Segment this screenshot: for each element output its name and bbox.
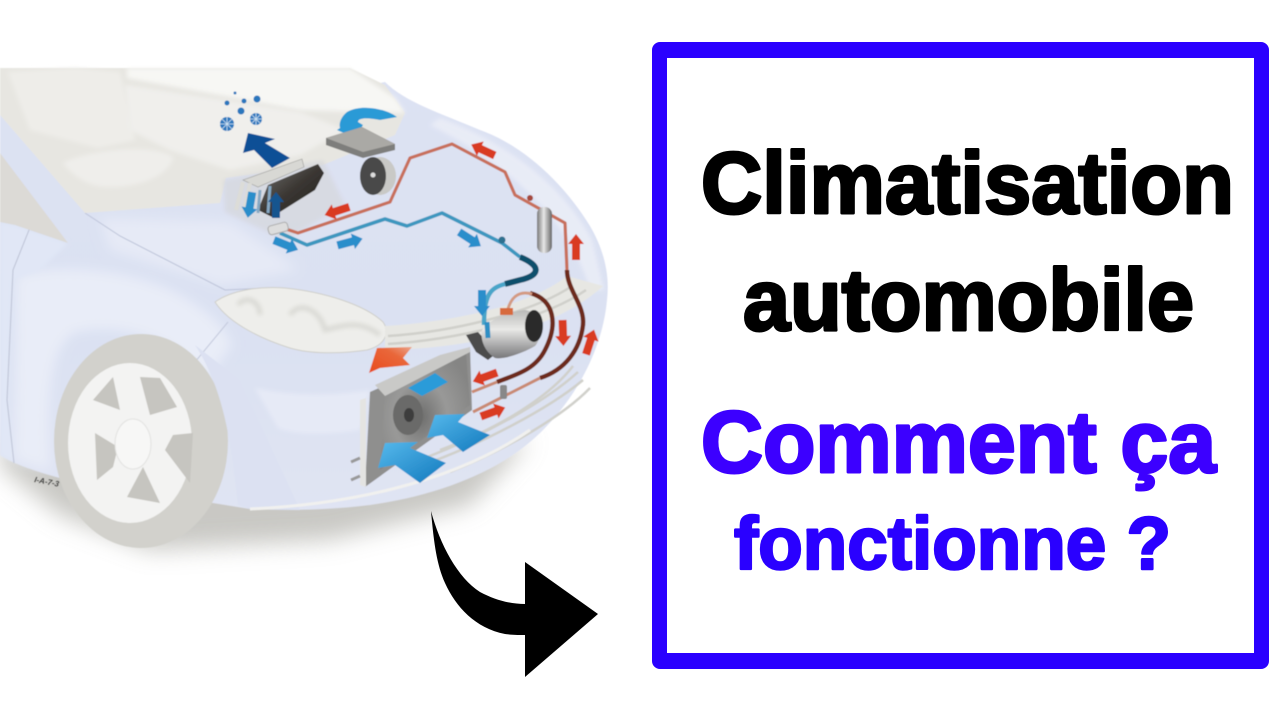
receiver drier bbox=[537, 207, 552, 253]
pipe to condenser upper bbox=[472, 382, 497, 392]
dashboard top bbox=[125, 85, 345, 170]
brown hose to condenser bbox=[540, 270, 583, 378]
arrow: air flow middle bbox=[427, 414, 490, 452]
hood highlight bbox=[430, 118, 604, 290]
arrow: intake air curved bbox=[337, 108, 397, 138]
arrow: flow blue 1 bbox=[271, 233, 301, 257]
condenser and fan bbox=[351, 347, 472, 487]
icon: snowflakes bbox=[220, 92, 262, 131]
subheading: fonctionne ?: fonctionne ? bbox=[734, 502, 1171, 585]
front fender highlight bbox=[15, 270, 232, 470]
dark blue hose bbox=[505, 257, 536, 284]
grille stripe set bbox=[388, 286, 590, 472]
A-pillar window bbox=[0, 153, 68, 243]
panel border bbox=[652, 42, 1269, 669]
headlight lens detail bbox=[238, 300, 380, 335]
service port red bbox=[527, 195, 533, 201]
blower fan bbox=[360, 157, 396, 195]
heading: automobile: automobile bbox=[743, 252, 1194, 349]
fender panel right of tyre bbox=[195, 345, 300, 510]
wheel rim bbox=[68, 363, 193, 523]
pressure switch bbox=[500, 385, 507, 399]
evaporator bbox=[236, 159, 324, 217]
arrow: hot air out orange bbox=[369, 347, 412, 373]
interior and dashboard bbox=[0, 68, 405, 213]
brown hose from compressor bbox=[497, 293, 553, 382]
evaporator housing bbox=[223, 160, 345, 240]
pipe expansion valve bbox=[267, 222, 289, 235]
service port bbox=[498, 236, 506, 244]
arrow: evaporator out bbox=[268, 192, 284, 218]
cowl highlight bbox=[100, 218, 300, 285]
bumper fog recess bbox=[255, 388, 370, 434]
arrow: air flow lower bbox=[378, 442, 446, 483]
arrow: flow blue 4 bbox=[474, 290, 490, 316]
pipe to condenser lower bbox=[473, 378, 540, 412]
blue hose to compressor bbox=[484, 284, 505, 325]
bumper lip bbox=[250, 430, 530, 509]
hood crease line bbox=[85, 213, 268, 290]
red refrigerant pipe bbox=[283, 144, 567, 270]
tyre bbox=[54, 334, 228, 548]
part number label: I-A-7-3 bbox=[34, 475, 60, 489]
arrow: flow red 1 bbox=[468, 137, 498, 163]
arrow: flow blue 2 bbox=[335, 231, 365, 253]
headlight bbox=[215, 288, 386, 353]
arrow: flow red 3 bbox=[568, 234, 584, 260]
arrow: cold air to cabin bbox=[243, 133, 290, 168]
arrow: flow red 5 bbox=[578, 327, 602, 357]
car body bbox=[0, 82, 608, 510]
seat cushion bbox=[63, 149, 173, 187]
heading: Climatisation: Climatisation bbox=[701, 135, 1234, 232]
arrow: air flow top bbox=[408, 373, 448, 396]
fender shut line bbox=[190, 322, 228, 368]
illustration: car with air-conditioning circuit bbox=[0, 68, 608, 550]
arrow: flow red 4 bbox=[555, 320, 571, 346]
arrow: flow red 6 bbox=[470, 365, 500, 389]
windscreen glare bbox=[127, 68, 405, 113]
arrow: flow blue 3 bbox=[455, 225, 485, 253]
panel: title box bbox=[652, 42, 1269, 669]
seat back bbox=[8, 68, 135, 148]
subheading: Comment ça: Comment ça bbox=[701, 394, 1217, 491]
arrow: flow red 7 bbox=[478, 400, 508, 424]
door panel bbox=[0, 222, 68, 460]
car ground shadow bbox=[0, 440, 530, 550]
upper grille band bbox=[385, 276, 603, 350]
cabin filter bbox=[326, 127, 395, 158]
arrow: black curved pointer bbox=[431, 511, 598, 677]
compressor bbox=[466, 308, 543, 360]
copper pipe to compressor bbox=[507, 293, 532, 313]
arrow: evaporator in bbox=[240, 191, 260, 219]
arrow: flow red 2 bbox=[322, 199, 352, 223]
blue refrigerant pipe bbox=[280, 213, 520, 257]
door shut line bbox=[7, 210, 37, 463]
